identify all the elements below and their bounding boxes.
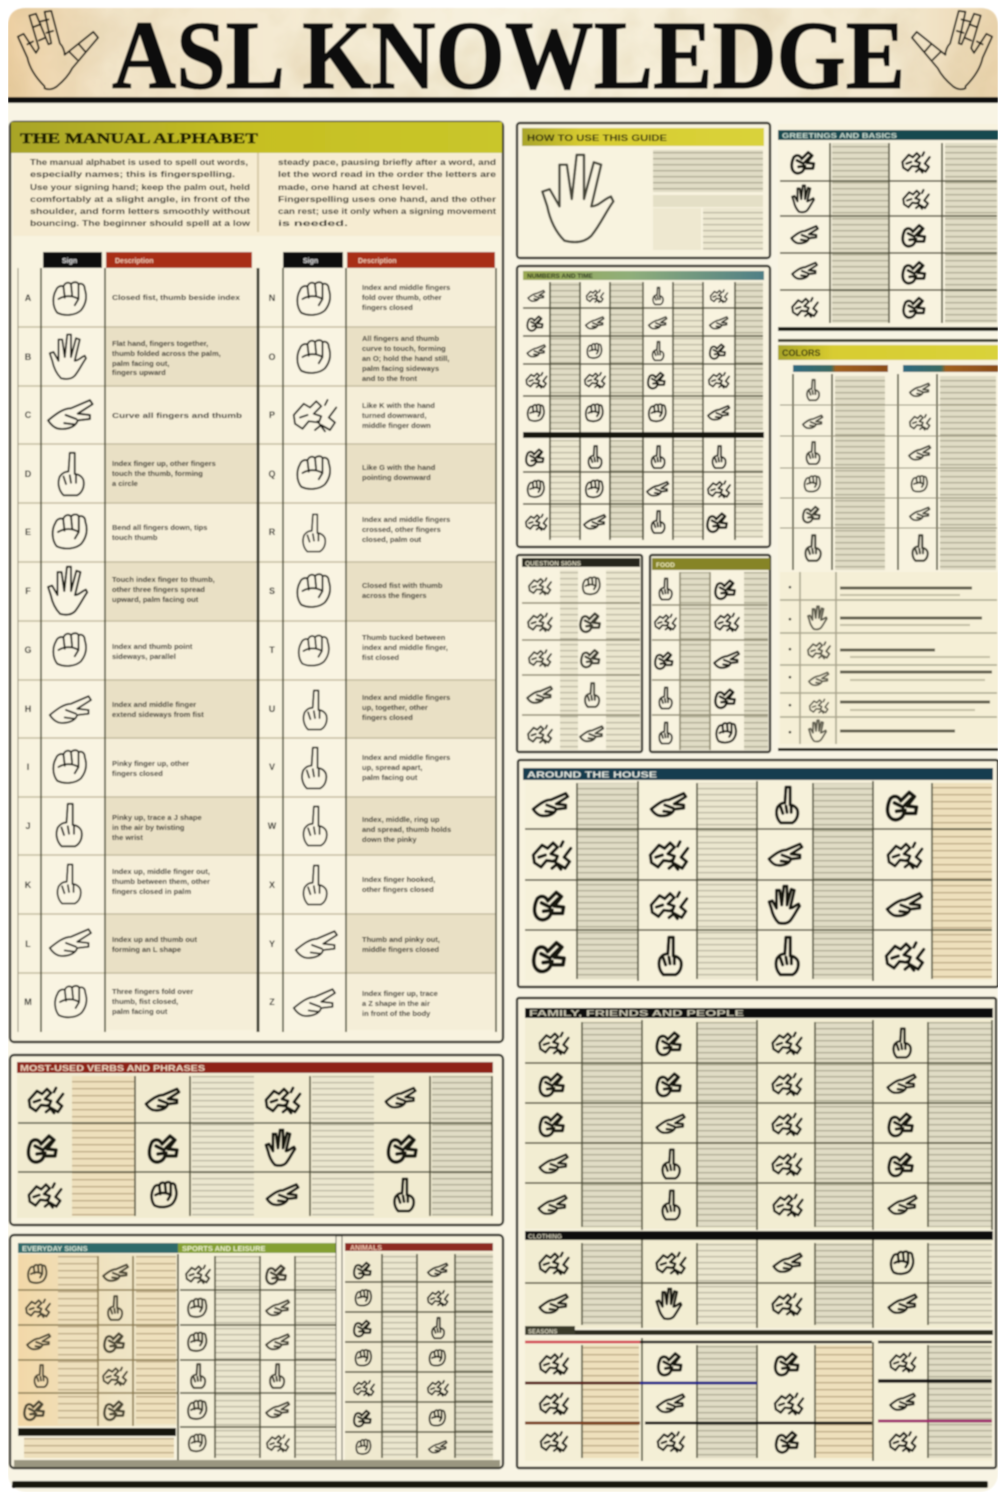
intro text: comfortably at a slight angle, in front of the bbox=[30, 194, 250, 204]
letter markers: T bbox=[269, 645, 275, 655]
sign descriptions N to Z: Index finger up, trace bbox=[362, 989, 438, 998]
sign grid: animals bbox=[345, 1252, 493, 1460]
alphabet table header: Sign bbox=[62, 258, 77, 265]
sign descriptions N to Z: Index, middle, ring up bbox=[362, 815, 440, 824]
letter markers: F bbox=[25, 586, 31, 596]
heading: FOOD bbox=[656, 562, 675, 569]
sign descriptions N to Z: fold over thumb, other bbox=[362, 293, 442, 302]
panel: numbers and time bbox=[517, 266, 770, 547]
sign descriptions A to M: sideways, parallel bbox=[112, 652, 176, 661]
intro text: is needed. bbox=[278, 218, 348, 228]
heading bbox=[522, 558, 640, 568]
icon: right ILY hand bbox=[912, 11, 992, 89]
sign descriptions N to Z: curve to touch, forming bbox=[362, 344, 446, 353]
icon: large hand bbox=[542, 155, 613, 242]
guide text bbox=[653, 150, 763, 250]
panel: top right phrases bbox=[778, 124, 998, 331]
sign descriptions A to M: extend sideways from fist bbox=[112, 710, 204, 719]
sign descriptions A to M: Three fingers fold over bbox=[112, 987, 193, 996]
table header bbox=[793, 365, 998, 372]
sign descriptions N to Z: fingers closed bbox=[362, 303, 413, 312]
intro text: can rest; use it only when a signing movement bbox=[278, 206, 496, 216]
heading bbox=[522, 128, 764, 146]
heading: HOW TO USE THIS GUIDE bbox=[527, 133, 667, 143]
letter markers: L bbox=[25, 939, 31, 949]
sign descriptions A to M: Closed fist, thumb beside index bbox=[112, 293, 241, 302]
heading: clothing: CLOTHING bbox=[528, 1234, 562, 1240]
sign descriptions A to M: Pinky finger up, other bbox=[112, 759, 189, 768]
paper texture bbox=[8, 8, 998, 98]
sign grid bbox=[652, 572, 768, 750]
intro text: made, one hand at chest level. bbox=[278, 182, 428, 192]
sign descriptions N to Z: middle finger down bbox=[362, 421, 431, 430]
icon: left ILY hand bbox=[18, 11, 98, 89]
intro text: Fingerspelling uses one hand, and the other bbox=[278, 194, 497, 204]
sign descriptions A to M: touch thumb bbox=[112, 533, 158, 542]
intro text: shoulder, and form letters smoothly without bbox=[30, 206, 250, 216]
sign descriptions A to M: Touch index finger to thumb, bbox=[112, 575, 215, 584]
header band bbox=[8, 7, 998, 104]
sign descriptions N to Z: and spread, thumb holds bbox=[362, 825, 451, 834]
panel: food bbox=[650, 555, 770, 752]
panel: how to use this guide bbox=[517, 123, 770, 258]
sign grid bbox=[525, 781, 992, 981]
sign descriptions A to M: thumb between them, other bbox=[112, 877, 210, 886]
sign descriptions N to Z: closed, palm out bbox=[362, 535, 422, 544]
sign descriptions N to Z: up, spread apart, bbox=[362, 763, 422, 772]
intro text: especially names; this is fingerspelling. bbox=[30, 169, 235, 179]
sign descriptions N to Z: Thumb and pinky out, bbox=[362, 935, 440, 944]
black bar bbox=[523, 432, 764, 438]
letter markers: Q bbox=[268, 469, 276, 479]
sign descriptions A to M: Index up, middle finger out, bbox=[112, 867, 210, 876]
sign grid: family bbox=[525, 1019, 993, 1230]
panel: the manual alphabet bbox=[10, 122, 503, 1042]
alphabet table grid bbox=[18, 268, 496, 1032]
heading bbox=[778, 345, 998, 360]
sign descriptions N to Z bbox=[362, 283, 451, 1018]
sign descriptions N to Z: index and middle finger, bbox=[362, 643, 448, 652]
sign descriptions A to M: Bend all fingers down, tips bbox=[112, 523, 207, 532]
heading bbox=[652, 558, 770, 570]
letter markers: B bbox=[25, 352, 32, 362]
sign descriptions A to M: thumb folded across the palm, bbox=[112, 349, 221, 358]
letter markers: H bbox=[25, 704, 31, 714]
heading: teal bbox=[18, 1243, 178, 1253]
sign descriptions A to M: Index and thumb point bbox=[112, 642, 193, 651]
heading: seasons: SEASONS bbox=[528, 1330, 557, 1336]
sign descriptions N to Z: fist closed bbox=[362, 653, 400, 662]
letter markers: Z bbox=[269, 997, 275, 1007]
sign descriptions N to Z: across the fingers bbox=[362, 591, 427, 600]
sign descriptions A to M: upward, palm facing out bbox=[112, 595, 199, 604]
sign grid: clothing bbox=[525, 1240, 993, 1328]
heading bbox=[17, 1062, 493, 1073]
heading: green: SPORTS AND LEISURE bbox=[182, 1244, 265, 1253]
heading bbox=[778, 130, 998, 140]
letter markers: V bbox=[269, 762, 275, 772]
heading: COLORS bbox=[782, 348, 821, 358]
sign grid: warm bbox=[18, 1254, 178, 1426]
sign descriptions N to Z: palm facing sideways bbox=[362, 364, 439, 373]
heading: clothing bbox=[525, 1231, 993, 1240]
letter markers: P bbox=[269, 410, 275, 420]
heading: MOST-USED VERBS AND PHRASES bbox=[20, 1063, 205, 1073]
sign descriptions N to Z: middle fingers closed bbox=[362, 945, 440, 954]
panel: family, friends and people bbox=[517, 998, 996, 1468]
sign descriptions N to Z: pointing downward bbox=[362, 473, 431, 482]
sign grid: seasons bbox=[525, 1338, 993, 1461]
heading: NUMBERS AND TIME bbox=[527, 273, 594, 280]
sign descriptions A to M: other three fingers spread bbox=[112, 585, 205, 594]
sign descriptions A to M: Pinky up, trace a J shape bbox=[112, 813, 202, 822]
sign descriptions N to Z: fingers closed bbox=[362, 713, 413, 722]
sign grid bbox=[522, 570, 640, 750]
heading bbox=[523, 271, 764, 280]
sign descriptions N to Z: Index finger hooked, bbox=[362, 875, 435, 884]
heading: the manual alphabet: THE MANUAL ALPHABET bbox=[20, 131, 258, 147]
black bar with text bbox=[18, 1428, 176, 1458]
sign list: wide rows: • bbox=[788, 582, 792, 592]
sign descriptions N to Z: a Z shape in the air bbox=[362, 999, 430, 1008]
heading: GREETINGS AND BASICS bbox=[782, 131, 897, 140]
sign descriptions N to Z: crossed, other fingers bbox=[362, 525, 441, 534]
sign grid: two columns bbox=[780, 374, 997, 570]
sign descriptions A to M: Curve all fingers and thumb bbox=[112, 411, 243, 420]
sign descriptions A to M: palm facing out bbox=[112, 1007, 168, 1016]
sign list: wide rows: • bbox=[788, 727, 792, 737]
letter markers: K bbox=[25, 880, 32, 890]
intro text: bouncing. The beginner should spell at a low bbox=[30, 218, 251, 228]
heading: QUESTION SIGNS bbox=[525, 560, 582, 568]
sign list: wide rows: • bbox=[788, 614, 792, 624]
sign list: wide rows: • bbox=[788, 644, 792, 654]
intro text: The manual alphabet is used to spell out words, bbox=[30, 157, 248, 167]
heading: green bbox=[178, 1243, 336, 1253]
alphabet table header: Description bbox=[358, 258, 397, 265]
hand signs A to Z bbox=[48, 282, 337, 1017]
sign descriptions N to Z: turned downward, bbox=[362, 411, 427, 420]
letter markers: S bbox=[269, 586, 275, 596]
letter markers: E bbox=[25, 527, 31, 537]
alphabet table header: Sign bbox=[303, 258, 318, 265]
sign descriptions N to Z: Index and middle fingers bbox=[362, 753, 450, 762]
heading: the manual alphabet bbox=[11, 122, 502, 153]
sign descriptions A to M: the wrist bbox=[112, 833, 143, 842]
letter markers: J bbox=[25, 821, 31, 831]
heading: teal: EVERYDAY SIGNS bbox=[22, 1244, 88, 1253]
sign descriptions N to Z: up, together, other bbox=[362, 703, 428, 712]
sign descriptions N to Z: Like G with the hand bbox=[362, 463, 436, 472]
letter markers: N bbox=[269, 293, 275, 303]
sign descriptions A to M: fingers upward bbox=[112, 368, 166, 377]
panel: verbs and phrases bbox=[10, 1055, 503, 1225]
sign grid: sports bbox=[178, 1254, 336, 1460]
letter markers: D bbox=[25, 469, 32, 479]
intro text: let the word read in the order the letters are bbox=[278, 169, 496, 179]
letter markers bbox=[24, 293, 277, 1007]
letter markers: Y bbox=[269, 939, 275, 949]
letter markers: O bbox=[268, 352, 276, 362]
sign descriptions A to M bbox=[112, 293, 243, 1016]
letter markers: M bbox=[24, 997, 32, 1007]
sign descriptions N to Z: in front of the body bbox=[362, 1009, 431, 1018]
sign grid bbox=[17, 1074, 493, 1218]
sign descriptions A to M: a circle bbox=[112, 479, 138, 488]
letter markers: U bbox=[269, 704, 275, 714]
letter markers: G bbox=[24, 645, 32, 655]
sign descriptions A to M: palm facing out, bbox=[112, 359, 170, 368]
sign descriptions N to Z: Index and middle fingers bbox=[362, 693, 450, 702]
sign descriptions N to Z: and to the front bbox=[362, 374, 417, 383]
sign descriptions A to M: Flat hand, fingers together, bbox=[112, 339, 208, 348]
intro text bbox=[13, 153, 501, 236]
heading: red bbox=[345, 1243, 493, 1252]
panel: everyday signs, sports and animals bbox=[10, 1235, 503, 1468]
sign grid bbox=[780, 143, 997, 323]
alphabet table header bbox=[43, 252, 495, 268]
sign descriptions N to Z: an O; hold the hand still, bbox=[362, 354, 450, 363]
sign descriptions N to Z: palm facing out bbox=[362, 773, 418, 782]
sign descriptions A to M: in the air by twisting bbox=[112, 823, 185, 832]
heading: FAMILY, FRIENDS AND PEOPLE bbox=[529, 1009, 745, 1018]
sign list: wide rows: • bbox=[788, 700, 792, 710]
panel: questions and phrases bbox=[517, 555, 642, 752]
letter markers: A bbox=[25, 293, 32, 303]
letter markers: X bbox=[269, 880, 275, 890]
heading bbox=[525, 1008, 993, 1018]
letter markers: R bbox=[269, 527, 276, 537]
intro text: steady pace, pausing briefly after a word, and bbox=[278, 157, 496, 167]
intro text: Use your signing hand; keep the palm out, held bbox=[30, 182, 250, 192]
sign descriptions A to M: Index and middle finger bbox=[112, 700, 196, 709]
sign descriptions N to Z: Like K with the hand bbox=[362, 401, 435, 410]
sign descriptions N to Z: other fingers closed bbox=[362, 885, 434, 894]
title: ASL KNOWLEDGE bbox=[112, 2, 905, 110]
sign descriptions A to M: Index up and thumb out bbox=[112, 935, 197, 944]
sign grid: upper bbox=[523, 282, 763, 540]
heading: AROUND THE HOUSE bbox=[527, 770, 657, 780]
sign descriptions N to Z: Index and middle fingers bbox=[362, 515, 450, 524]
heading: red: ANIMALS bbox=[350, 1245, 382, 1252]
sign descriptions N to Z: Index and middle fingers bbox=[362, 283, 450, 292]
sign descriptions N to Z: Thumb tucked between bbox=[362, 633, 446, 642]
sign descriptions N to Z: All fingers and thumb bbox=[362, 334, 440, 343]
sign descriptions N to Z: down the pinky bbox=[362, 835, 417, 844]
letter markers: C bbox=[25, 410, 32, 420]
sign descriptions A to M: Index finger up, other fingers bbox=[112, 459, 216, 468]
sign descriptions A to M: forming an L shape bbox=[112, 945, 181, 954]
sign descriptions N to Z: Closed fist with thumb bbox=[362, 581, 443, 590]
panel: colors bbox=[778, 338, 998, 751]
sign descriptions A to M: fingers closed in palm bbox=[112, 887, 192, 896]
sign descriptions A to M: fingers closed bbox=[112, 769, 163, 778]
alphabet table header: Description bbox=[115, 258, 154, 265]
sign list: wide rows: • bbox=[788, 672, 792, 682]
panel: around the house bbox=[518, 760, 998, 987]
bottom rule bbox=[12, 1481, 988, 1488]
sign descriptions A to M: thumb, fist closed, bbox=[112, 997, 178, 1006]
sign descriptions A to M: touch the thumb, forming bbox=[112, 469, 203, 478]
letter markers: W bbox=[268, 821, 277, 831]
heading bbox=[523, 768, 993, 780]
letter markers: I bbox=[27, 762, 29, 772]
sign grid: lower bbox=[523, 440, 763, 538]
heading: seasons bbox=[525, 1326, 993, 1336]
divider bbox=[336, 1236, 342, 1466]
sign list: wide rows bbox=[780, 572, 998, 744]
